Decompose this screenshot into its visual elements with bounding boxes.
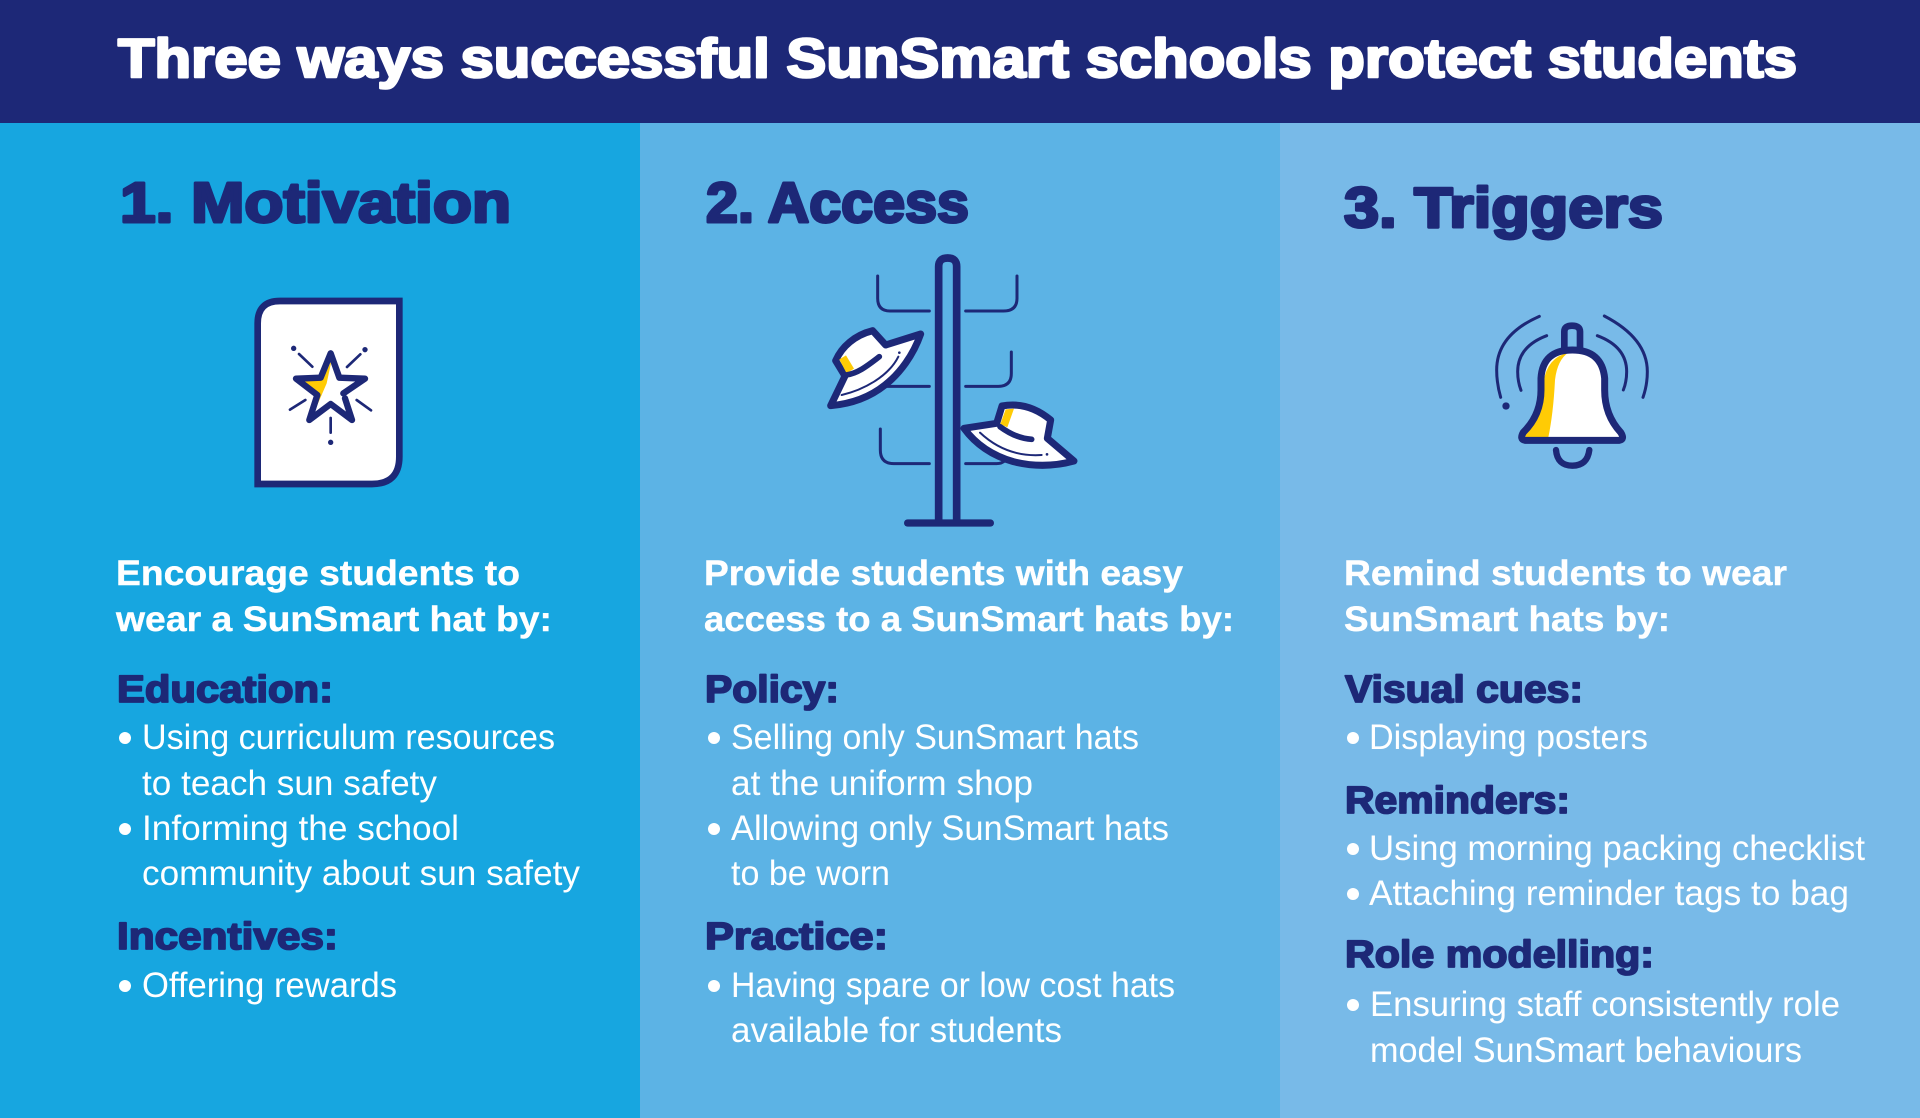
section: reminders: Using morning packing checklist [1369, 829, 1865, 868]
intro text: wear a SunSmart hat by: [115, 599, 552, 639]
section: education: community about sun safety [142, 854, 580, 893]
section: policy: Policy: [705, 669, 839, 711]
section: role modelling: Role modelling: [1345, 934, 1654, 976]
section: practice: Having spare or low cost hats [731, 966, 1175, 1005]
heading: 2. Access: 2. Access [706, 171, 969, 235]
icon: hat stand with two hats [831, 258, 1074, 523]
section: reminders: Reminders: [1345, 780, 1570, 822]
intro text [115, 553, 552, 639]
heading: 3. Triggers: 3. Triggers [1344, 176, 1663, 240]
intro text [1344, 553, 1787, 639]
intro text [704, 553, 1234, 639]
section: practice: available for students [731, 1011, 1062, 1050]
intro text: access to a SunSmart hats by: [704, 599, 1234, 639]
intro text: Provide students with easy [704, 553, 1183, 593]
section: policy [705, 669, 1169, 893]
panel: motivation [0, 123, 640, 1118]
icon: ringing bell [1497, 316, 1647, 466]
section: role modelling: model SunSmart behaviours [1370, 1031, 1802, 1070]
section: education [117, 669, 580, 893]
icon: star certificate [258, 301, 399, 484]
intro text: Encourage students to [116, 553, 520, 593]
header banner [0, 0, 1920, 123]
panel: triggers [1280, 123, 1920, 1118]
section: role modelling: Ensuring staff consistently role [1370, 985, 1840, 1024]
section: role modelling [1345, 934, 1840, 1070]
section: reminders [1345, 780, 1865, 913]
hat: left [831, 331, 921, 406]
section: policy: at the uniform shop [731, 764, 1033, 803]
intro text: SunSmart hats by: [1344, 599, 1670, 639]
panel: access [640, 123, 1280, 1118]
section: incentives: Offering rewards [142, 966, 397, 1005]
section: practice [705, 916, 1175, 1050]
intro text: Remind students to wear [1344, 553, 1787, 593]
section: reminders: Attaching reminder tags to bag [1369, 874, 1849, 913]
section: education: to teach sun safety [142, 764, 437, 803]
section: education: Informing the school [142, 809, 459, 848]
section: education: Using curriculum resources [142, 718, 555, 757]
section: visual cues: Visual cues: [1345, 669, 1583, 711]
section: education: Education: [117, 669, 333, 711]
section: visual cues [1345, 669, 1648, 757]
title: Three ways successful SunSmart schools protect students [118, 27, 1797, 89]
section: incentives: Incentives: [117, 916, 338, 958]
section: policy: Selling only SunSmart hats [731, 718, 1139, 757]
section: practice: Practice: [705, 916, 888, 958]
section: visual cues: Displaying posters [1369, 718, 1648, 757]
section: incentives [117, 916, 397, 1005]
section: policy: to be worn [731, 854, 890, 893]
heading: 1. Motivation: 1. Motivation [120, 171, 511, 235]
hat: right [964, 405, 1074, 465]
section: policy: Allowing only SunSmart hats [731, 809, 1169, 848]
